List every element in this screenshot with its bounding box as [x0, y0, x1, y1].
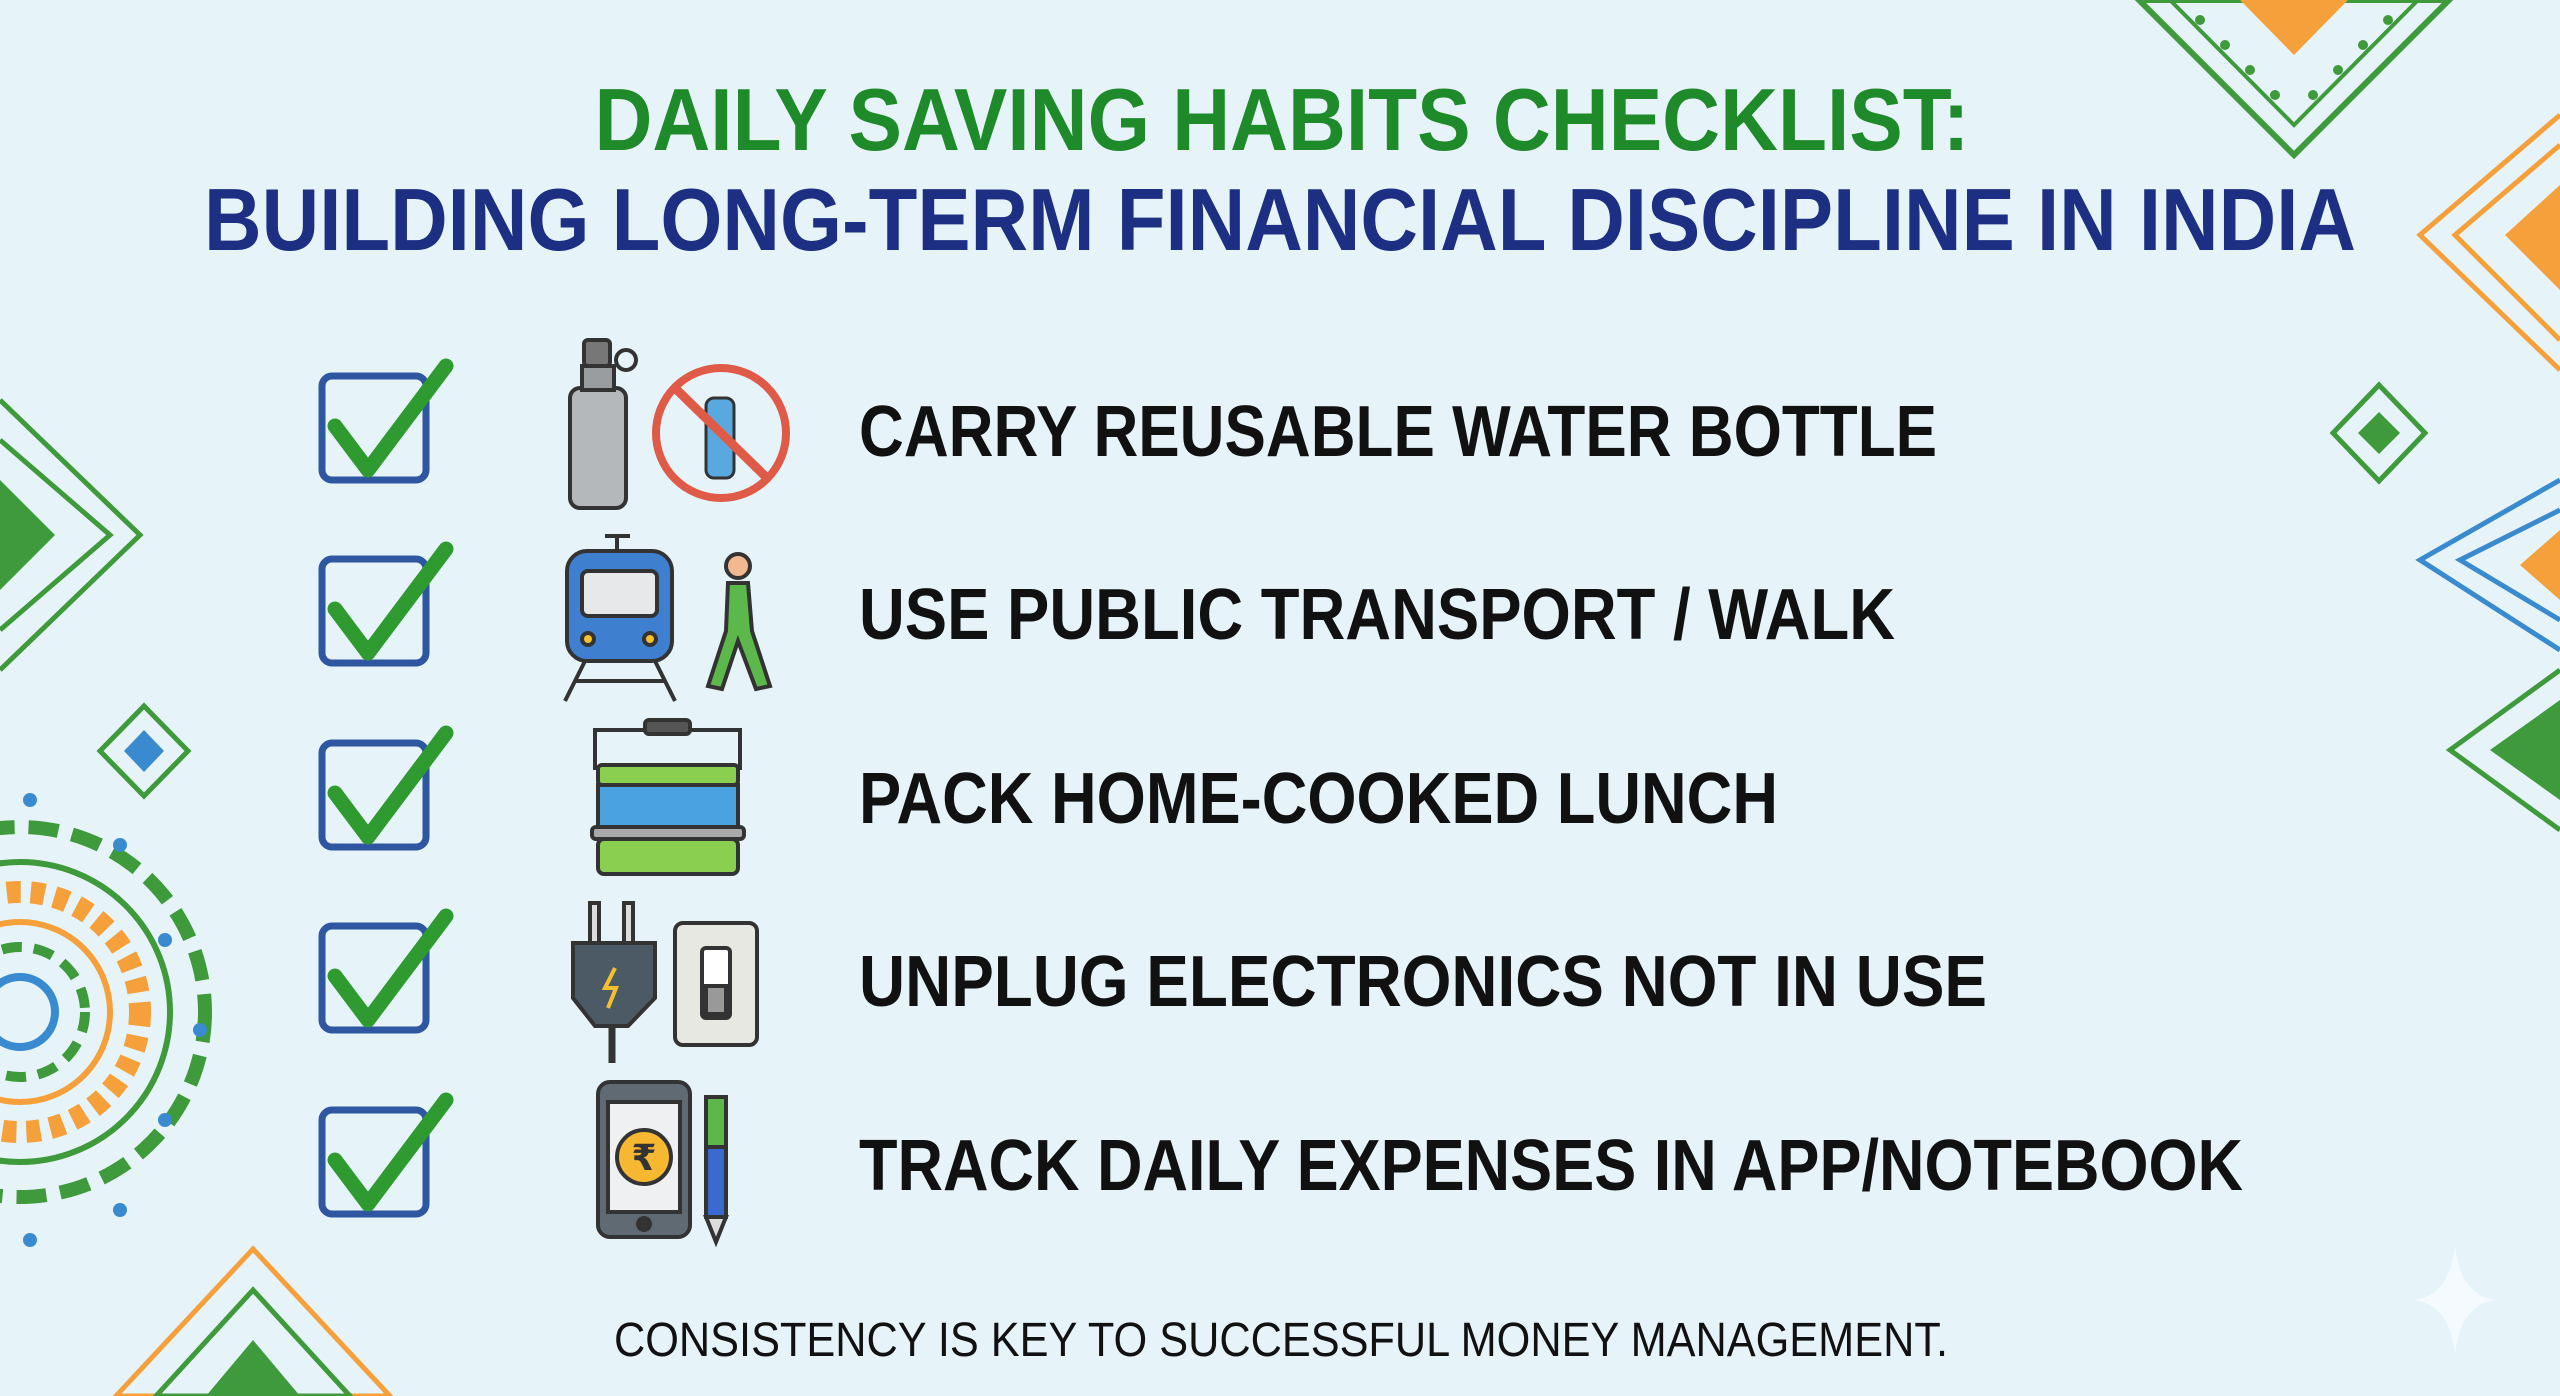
icon: phone and pen — [598, 1082, 726, 1242]
row 4 — [322, 903, 1987, 1063]
icon: train and walker — [565, 536, 770, 701]
text: CARRY REUSABLE WATER BOTTLE — [859, 392, 1937, 472]
checkbox — [322, 366, 446, 480]
footer: CONSISTENCY IS KEY TO SUCCESSFUL MONEY MANAGEMENT. — [614, 1314, 1948, 1367]
row 2 — [322, 536, 1895, 701]
row 5 — [322, 1082, 2243, 1242]
text: PACK HOME-COOKED LUNCH — [859, 759, 1778, 839]
row 3 — [322, 720, 1778, 874]
decoration: left diamond — [100, 706, 188, 796]
title line 1: DAILY SAVING HABITS CHECKLIST: — [594, 70, 1970, 169]
icon: lunchbox — [592, 720, 744, 874]
icon: bottle and no plastic — [570, 340, 786, 508]
row 1 — [322, 340, 1937, 508]
decoration: top right triangle — [2139, 0, 2449, 155]
icon: plug and switch — [573, 903, 757, 1063]
text: USE PUBLIC TRANSPORT / WALK — [859, 575, 1895, 655]
title line 2: BUILDING LONG-TERM FINANCIAL DISCIPLINE IN INDIA — [204, 170, 2356, 269]
decoration: right chevrons — [2420, 115, 2560, 830]
checkbox — [322, 549, 446, 663]
checkbox — [322, 916, 446, 1030]
icon: phone and pen: ₹ — [631, 1138, 657, 1179]
checkbox — [322, 1100, 446, 1214]
decoration: bottom left triangle — [116, 1249, 390, 1396]
decoration: right diamond — [2333, 385, 2425, 481]
decoration: mandala — [0, 793, 207, 1247]
decoration: sparkle — [2415, 1245, 2495, 1355]
text: TRACK DAILY EXPENSES IN APP/NOTEBOOK — [859, 1126, 2243, 1206]
text: UNPLUG ELECTRONICS NOT IN USE — [859, 942, 1987, 1022]
checkbox — [322, 733, 446, 847]
decoration: left chevrons — [0, 400, 140, 670]
